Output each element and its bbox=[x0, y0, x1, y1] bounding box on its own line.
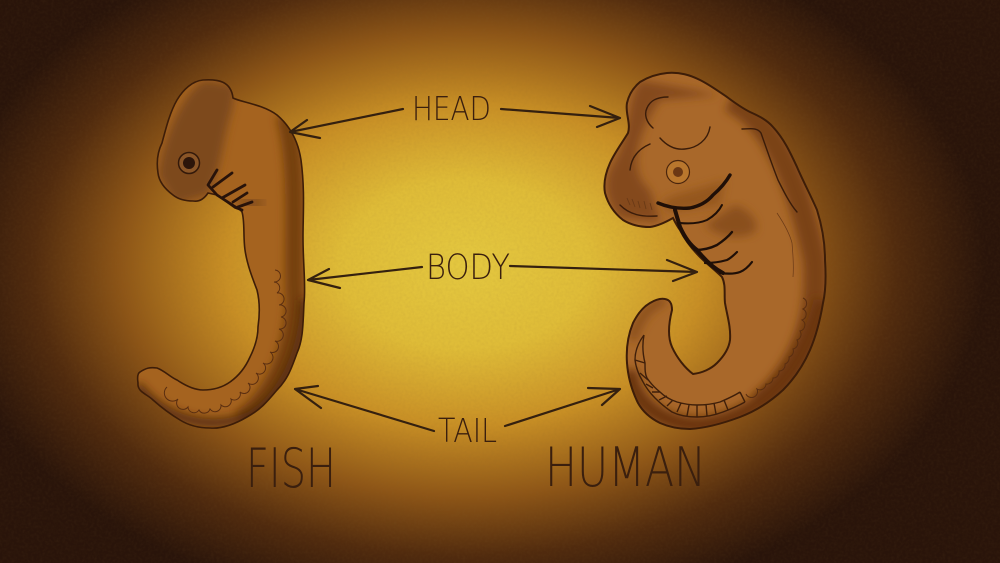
human gills bbox=[658, 175, 752, 274]
title: fish: FISH bbox=[246, 437, 336, 500]
label: body: BODY bbox=[426, 248, 510, 288]
fish eye bbox=[178, 152, 200, 174]
human embryo bbox=[600, 68, 832, 434]
human spine scallops bbox=[746, 298, 807, 398]
arrow: body to fish bbox=[308, 267, 422, 288]
human head creases bbox=[620, 97, 797, 216]
label: head: HEAD bbox=[412, 89, 491, 128]
human outline bbox=[604, 73, 826, 429]
arrow: tail to human bbox=[505, 388, 620, 426]
arrow: body to human bbox=[510, 260, 697, 281]
arrow: tail to fish bbox=[295, 386, 434, 431]
fish outline bbox=[138, 80, 305, 428]
fish embryo bbox=[136, 79, 306, 429]
arrow: head to fish bbox=[290, 109, 403, 138]
human body bbox=[600, 68, 832, 434]
title: human: HUMAN bbox=[545, 436, 706, 499]
fish gills bbox=[208, 170, 252, 210]
label: tail: TAIL bbox=[438, 411, 497, 450]
human side line bbox=[777, 213, 793, 277]
human eye bbox=[666, 160, 690, 184]
human tail segments bbox=[635, 335, 745, 417]
fish body bbox=[138, 80, 304, 428]
fish spine segments bbox=[164, 270, 286, 413]
arrow: head to human bbox=[501, 106, 620, 127]
human mouth ticks bbox=[627, 198, 652, 210]
